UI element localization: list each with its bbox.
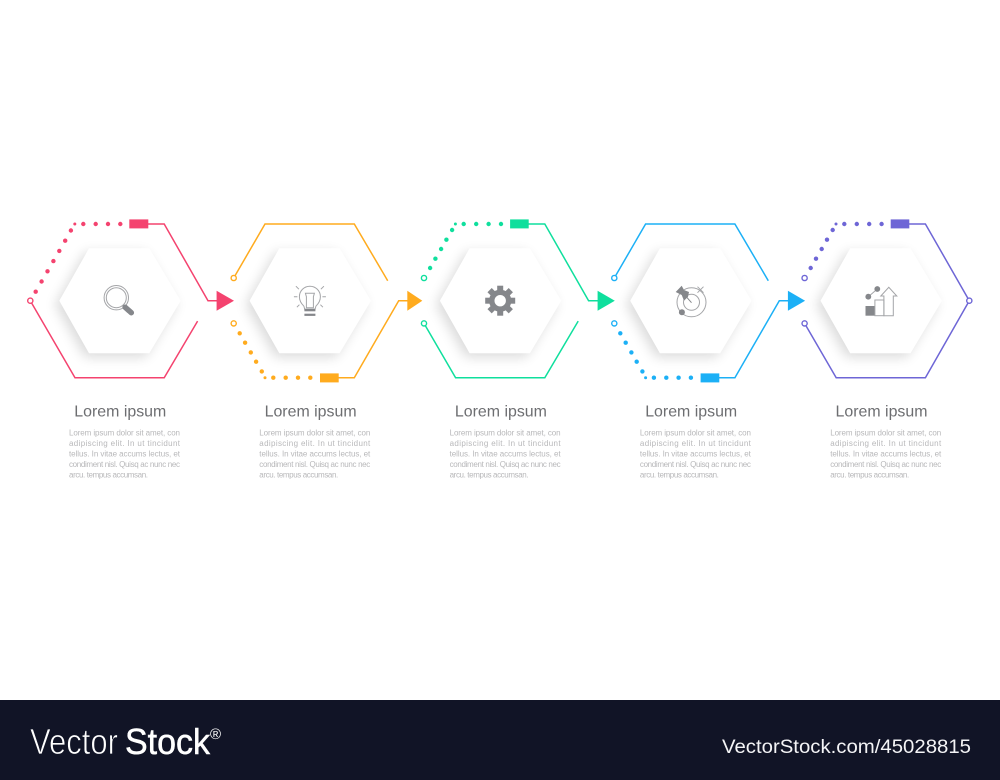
icon: magnifier xyxy=(104,286,131,313)
panel: step 2 xyxy=(231,224,422,479)
icon: light bulb xyxy=(294,286,326,316)
body text: step 5 xyxy=(830,429,942,479)
heading: step 3: Lorem ipsum xyxy=(455,404,547,421)
logo wordmark: ® xyxy=(210,726,221,743)
body text: step 2: Lorem ipsum dolor sit amet, con xyxy=(259,429,370,438)
body text: step 2: tellus. In vitae accums lectus, et xyxy=(259,450,371,459)
inner hexagon card xyxy=(55,248,181,357)
arrow: step 2 to 3 xyxy=(407,291,422,311)
heading: step 2: Lorem ipsum xyxy=(265,404,357,421)
body text: step 2: adipiscing elit. In ut tincidunt xyxy=(259,439,371,448)
body text: step 1: tellus. In vitae accums lectus, et xyxy=(69,450,181,459)
inner hexagon card xyxy=(816,248,942,357)
arrow: step 4 to 5 xyxy=(788,291,805,311)
panel: step 4 xyxy=(612,224,805,479)
logo wordmark: Vector xyxy=(30,721,118,762)
body text: step 1: Lorem ipsum dolor sit amet, con xyxy=(69,429,180,438)
footer bar xyxy=(0,700,1000,780)
logo wordmark xyxy=(30,721,221,762)
body text: step 1: arcu. tempus accumsan. xyxy=(69,470,148,479)
panel: step 5 xyxy=(802,219,972,479)
image id text: VectorStock.com/45028815 xyxy=(722,737,971,758)
body text: step 2: arcu. tempus accumsan. xyxy=(259,470,338,479)
heading: step 4: Lorem ipsum xyxy=(645,404,737,421)
icon: target with dart xyxy=(676,286,706,317)
body text: step 4: Lorem ipsum dolor sit amet, con xyxy=(640,429,751,438)
body text: step 1: adipiscing elit. In ut tincidunt xyxy=(69,439,181,448)
hexagon outline: purple xyxy=(802,219,972,378)
body text: step 5: condiment nisl. Quisq ac nunc nec xyxy=(830,460,941,469)
hexagon outline: pink xyxy=(28,219,218,378)
logo wordmark: Stock xyxy=(125,721,211,762)
panel: step 3 xyxy=(421,219,615,479)
body text: step 4 xyxy=(640,429,752,479)
panel: step 1 xyxy=(28,219,234,479)
inner hexagon card xyxy=(436,248,561,357)
icon: growth chart with arrow xyxy=(865,286,897,316)
hexagon outline: blue xyxy=(612,224,788,382)
body text: step 3: condiment nisl. Quisq ac nunc nec xyxy=(450,460,561,469)
body text: step 1: condiment nisl. Quisq ac nunc nec xyxy=(69,460,180,469)
body text: step 5: adipiscing elit. In ut tincidunt xyxy=(830,439,942,448)
body text: step 2: condiment nisl. Quisq ac nunc nec xyxy=(259,460,370,469)
body text: step 5: arcu. tempus accumsan. xyxy=(830,470,909,479)
body text: step 1 xyxy=(69,429,181,479)
body text: step 3: tellus. In vitae accums lectus, et xyxy=(450,450,561,459)
body text: step 3 xyxy=(450,429,561,479)
body text: step 5: Lorem ipsum dolor sit amet, con xyxy=(830,429,941,438)
hexagon outline: orange xyxy=(231,224,408,382)
body text: step 2 xyxy=(259,429,371,479)
body text: step 5: tellus. In vitae accums lectus, et xyxy=(830,450,942,459)
body text: step 4: arcu. tempus accumsan. xyxy=(640,470,719,479)
body text: step 4: condiment nisl. Quisq ac nunc nec xyxy=(640,460,751,469)
heading: step 5: Lorem ipsum xyxy=(835,404,927,421)
inner hexagon card xyxy=(626,248,752,357)
body text: step 3: Lorem ipsum dolor sit amet, con xyxy=(450,429,561,438)
body text: step 3: adipiscing elit. In ut tincidunt xyxy=(450,439,561,448)
heading: step 1: Lorem ipsum xyxy=(74,404,166,421)
body text: step 4: adipiscing elit. In ut tincidunt xyxy=(640,439,752,448)
hexagon outline: green xyxy=(421,219,598,378)
body text: step 4: tellus. In vitae accums lectus, et xyxy=(640,450,752,459)
arrow: step 3 to 4 xyxy=(598,291,615,311)
body text: step 3: arcu. tempus accumsan. xyxy=(450,470,529,479)
arrow: step 1 to 2 xyxy=(217,291,234,311)
icon: gear xyxy=(485,286,515,316)
inner hexagon card xyxy=(246,248,371,357)
